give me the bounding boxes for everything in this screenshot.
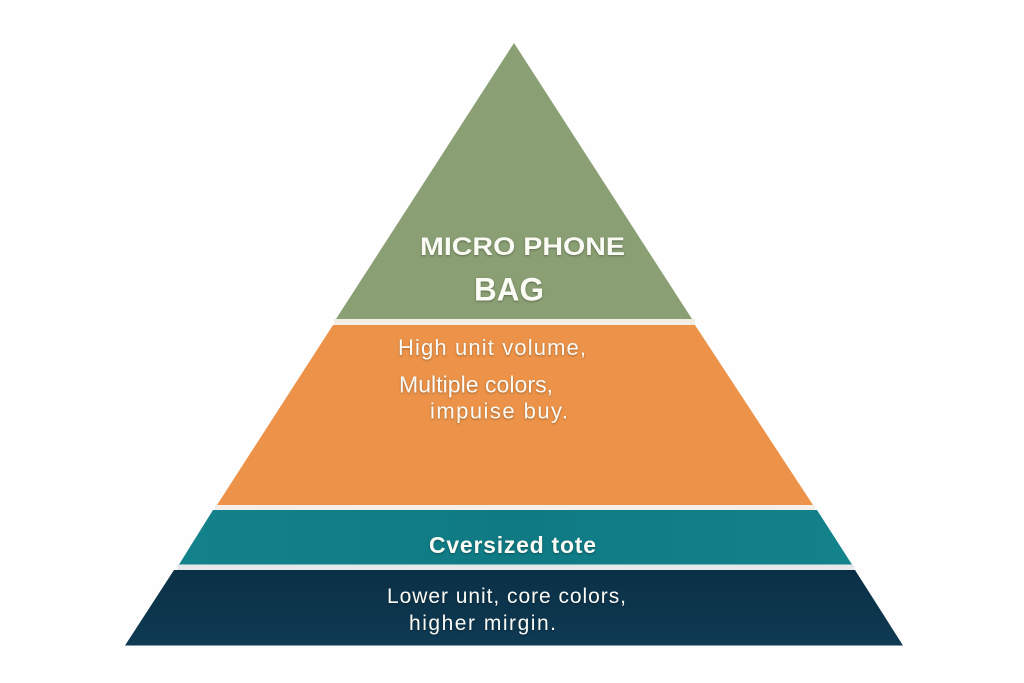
tier text: lower unit core colors <box>387 585 626 635</box>
tier text: high unit volume: impuise buy. <box>430 398 568 424</box>
tier: lower unit core colors <box>125 570 903 646</box>
tier text: oversized tote: Cversized tote <box>429 532 596 558</box>
tier separators <box>177 319 854 570</box>
tier heading: micro phone bag: BAG <box>474 272 544 308</box>
tier: micro phone bag <box>336 43 692 319</box>
tier heading: micro phone bag <box>420 233 625 308</box>
tier heading: micro phone bag: MICRO PHONE <box>420 233 625 261</box>
tier text: high unit volume: Multiple colors, <box>399 372 553 398</box>
tier text: high unit volume <box>398 335 586 424</box>
tier: oversized tote <box>179 510 852 564</box>
tier text: lower unit core colors: Lower unit, core colors, <box>387 585 626 608</box>
tier: high unit volume <box>217 325 813 505</box>
tier text: lower unit core colors: higher mirgin. <box>409 612 556 635</box>
tier text: high unit volume: High unit volume, <box>398 335 586 360</box>
